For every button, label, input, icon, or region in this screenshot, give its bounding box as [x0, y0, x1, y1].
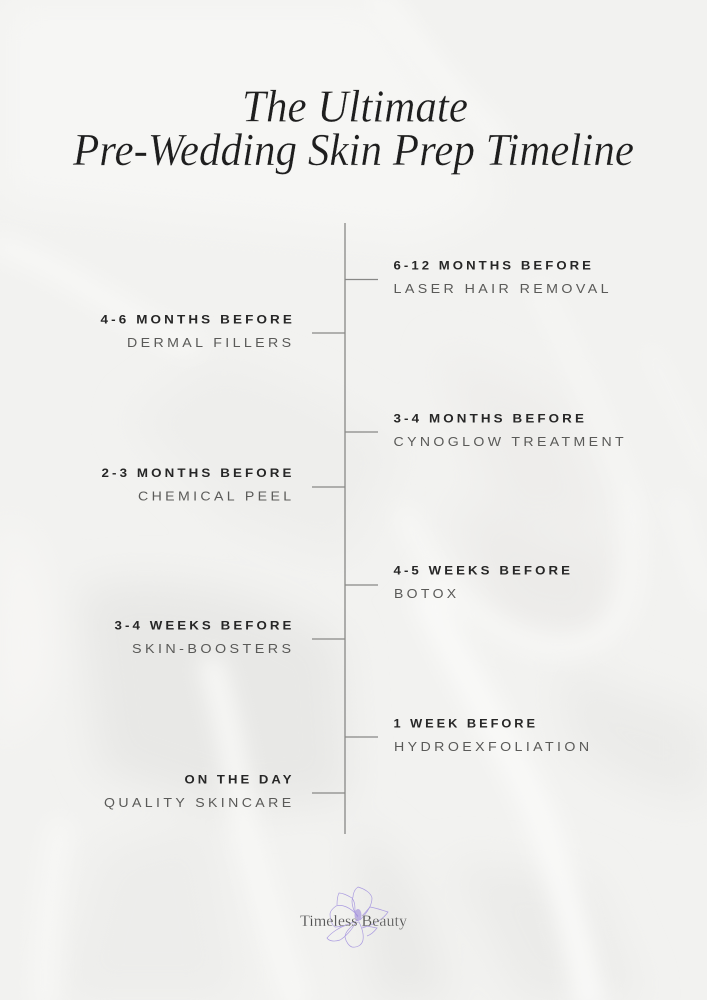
- entry: on the day: [104, 772, 294, 810]
- entry: 2-3 months before: [102, 466, 294, 504]
- entry: 1 week before: [394, 716, 592, 754]
- flower centre: [354, 909, 362, 921]
- wordmark: Timeless Beauty: [300, 913, 407, 930]
- entry: 3-4 weeks before: 3-4 WEEKS BEFORE: [114, 618, 294, 632]
- title: [72, 80, 634, 175]
- title: Pre-Wedding Skin Prep Timeline: [72, 124, 634, 175]
- entry: 4-6 months before: [100, 312, 295, 350]
- entry: 1 week before: 1 WEEK BEFORE: [394, 716, 538, 730]
- entry: 4-5 weeks before: [394, 564, 573, 601]
- entry: 4-5 weeks before: BOTOX: [394, 587, 460, 601]
- entry: 3-4 months before: 3-4 MONTHS BEFORE: [394, 412, 587, 426]
- timeline branches: [312, 280, 378, 793]
- entry: 2-3 months before: CHEMICAL PEEL: [138, 490, 294, 504]
- entry: on the day: QUALITY SKINCARE: [104, 796, 294, 810]
- entry: 4-6 months before: 4-6 MONTHS BEFORE: [100, 312, 295, 326]
- entry: 6-12 months before: 6-12 MONTHS BEFORE: [394, 258, 594, 272]
- timeline axis: [344, 223, 346, 834]
- logo: Timeless Beauty: [300, 887, 407, 947]
- entry: 3-4 weeks before: [114, 618, 294, 656]
- icon: magnolia flower: [327, 887, 388, 947]
- entry: 6-12 months before: [394, 258, 612, 296]
- entry: 4-5 weeks before: 4-5 WEEKS BEFORE: [394, 564, 573, 578]
- entry: 3-4 weeks before: SKIN-BOOSTERS: [132, 642, 294, 656]
- entry: 4-6 months before: DERMAL FILLERS: [127, 336, 294, 350]
- entry: 6-12 months before: LASER HAIR REMOVAL: [394, 282, 612, 296]
- entry: on the day: ON THE DAY: [184, 772, 294, 786]
- entry: 3-4 months before: [394, 412, 627, 449]
- entry: 2-3 months before: 2-3 MONTHS BEFORE: [102, 466, 294, 480]
- entry: 3-4 months before: CYNOGLOW TREATMENT: [394, 435, 627, 449]
- title: The Ultimate: [242, 80, 468, 132]
- entry: 1 week before: HYDROEXFOLIATION: [394, 740, 592, 754]
